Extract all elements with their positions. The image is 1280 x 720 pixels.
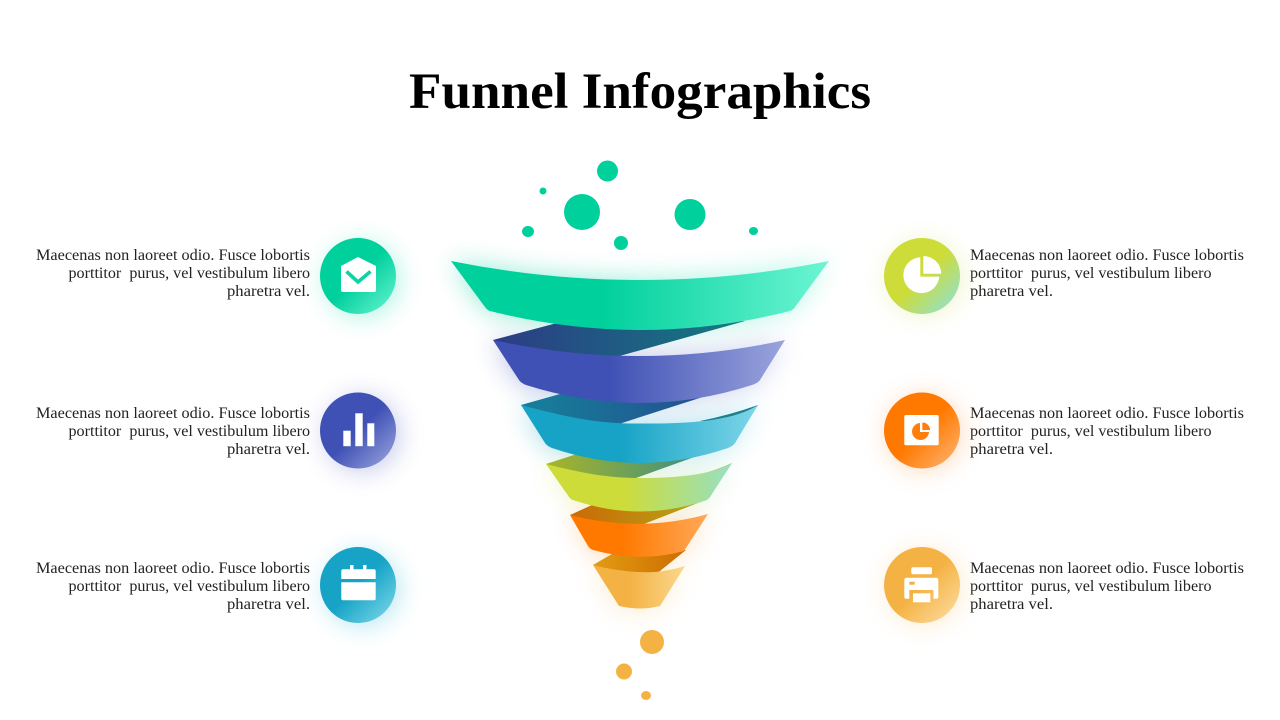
funnel particles: amber dots below funnel bbox=[616, 630, 664, 700]
text block bbox=[36, 405, 310, 458]
text block: porttitor purus, vel vestibulum libero bbox=[68, 578, 310, 595]
text block: pharetra vel. bbox=[970, 283, 1053, 300]
text block: porttitor purus, vel vestibulum libero bbox=[68, 423, 310, 440]
text block: pharetra vel. bbox=[227, 596, 310, 613]
text block bbox=[970, 405, 1244, 458]
funnel: layer 6 amber bbox=[593, 550, 686, 608]
funnel glow bbox=[451, 261, 829, 609]
text block: pharetra vel. bbox=[970, 596, 1053, 613]
funnel: layer 2 blue bbox=[493, 321, 785, 403]
panel: right item 3 bbox=[884, 547, 1244, 625]
text block: porttitor purus, vel vestibulum libero bbox=[970, 265, 1212, 282]
text block bbox=[36, 560, 310, 613]
text block bbox=[970, 560, 1244, 613]
text block: Maecenas non laoreet odio. Fusce lobortis bbox=[970, 560, 1244, 577]
text block: Maecenas non laoreet odio. Fusce lobortis bbox=[36, 247, 310, 264]
text block: Maecenas non laoreet odio. Fusce lobortis bbox=[970, 405, 1244, 422]
funnel particles: green dots above funnel bbox=[522, 160, 758, 250]
panel: right item 1 bbox=[884, 238, 1244, 316]
text block: pharetra vel. bbox=[970, 441, 1053, 458]
icon: calendar bbox=[320, 547, 400, 627]
text block: pharetra vel. bbox=[227, 441, 310, 458]
text block bbox=[36, 247, 310, 300]
icon: printer bbox=[884, 547, 962, 625]
icon: pie chart bbox=[884, 238, 962, 316]
text block: Maecenas non laoreet odio. Fusce lobortis bbox=[36, 560, 310, 577]
icon: bar chart bbox=[320, 392, 400, 472]
panel: left item 1 bbox=[36, 238, 400, 318]
text block: porttitor purus, vel vestibulum libero bbox=[970, 578, 1212, 595]
text block: porttitor purus, vel vestibulum libero bbox=[68, 265, 310, 282]
funnel: layer 5 orange bbox=[570, 499, 708, 557]
text block: Maecenas non laoreet odio. Fusce lobortis bbox=[36, 405, 310, 422]
panel: left item 3 bbox=[36, 547, 400, 627]
title: Funnel Infographics bbox=[409, 64, 871, 120]
text block: Maecenas non laoreet odio. Fusce lobortis bbox=[970, 247, 1244, 264]
panel: right item 2 bbox=[884, 392, 1244, 471]
funnel: layer 1 green bbox=[451, 261, 829, 330]
text block bbox=[970, 247, 1244, 300]
panel: left item 2 bbox=[36, 392, 400, 472]
icon: envelope bbox=[320, 238, 400, 318]
text block: porttitor purus, vel vestibulum libero bbox=[970, 423, 1212, 440]
text block: pharetra vel. bbox=[227, 283, 310, 300]
funnel: layer 3 teal bbox=[521, 394, 758, 463]
funnel: layer 4 lime bbox=[546, 453, 732, 512]
icon: presentation slide bbox=[884, 392, 962, 471]
